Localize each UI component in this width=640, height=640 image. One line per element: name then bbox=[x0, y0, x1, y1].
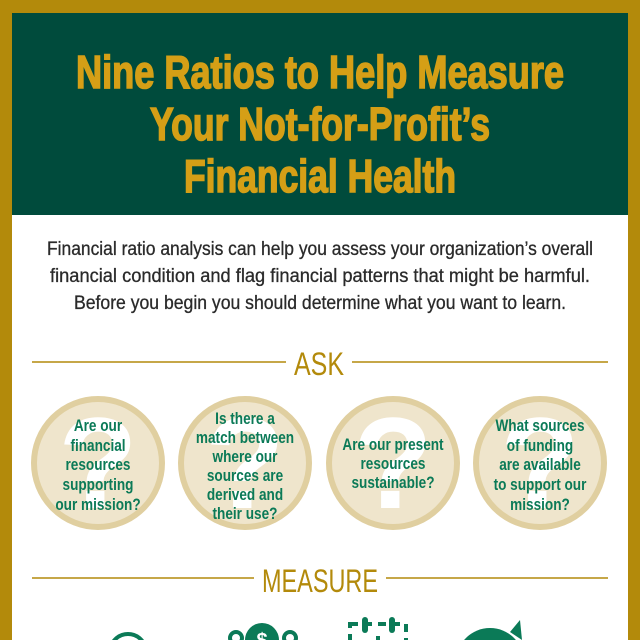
intro text: financial condition and flag financial patterns that might be harmful. bbox=[50, 266, 590, 287]
circle 4: ? bbox=[500, 390, 580, 536]
icon: target bbox=[110, 634, 146, 640]
circle 4 bbox=[476, 390, 604, 536]
circle 4: of funding bbox=[507, 437, 573, 455]
circle 4: to support our bbox=[494, 476, 586, 494]
circle 2: ? bbox=[205, 390, 285, 536]
circle 3: sustainable? bbox=[351, 474, 435, 492]
circle 3: ? bbox=[353, 390, 433, 536]
circle 2: match between bbox=[196, 429, 294, 447]
circle 2: where our bbox=[212, 448, 277, 466]
intro text: Financial ratio analysis can help you assess your organization’s overall bbox=[47, 239, 593, 260]
title: Financial Health bbox=[184, 150, 456, 202]
circle 2: sources are bbox=[207, 467, 284, 485]
circle 2: Is there a bbox=[215, 410, 275, 428]
circle 2: derived and bbox=[207, 486, 283, 504]
circle 1: supporting bbox=[63, 476, 133, 494]
title: Your Not-for-Profit’s bbox=[150, 98, 490, 150]
circle 1: ? bbox=[58, 390, 138, 536]
icon: refresh coin bbox=[456, 620, 524, 640]
title bbox=[76, 46, 564, 202]
circle 1: our mission? bbox=[55, 496, 141, 514]
circle 1 bbox=[34, 390, 162, 536]
circle 4: What sources bbox=[495, 417, 585, 435]
header panel bbox=[12, 13, 628, 215]
icon: calendar bbox=[350, 617, 406, 640]
circle 4: mission? bbox=[510, 496, 570, 514]
circle 3: resources bbox=[361, 455, 425, 473]
circle 2 bbox=[181, 390, 309, 536]
circle 3: Are our present bbox=[342, 436, 444, 454]
ask circles bbox=[34, 390, 604, 536]
intro text: Before you begin you should determine what you want to learn. bbox=[74, 293, 566, 314]
circle 3 bbox=[329, 390, 457, 536]
icon: people with dollar bbox=[230, 623, 296, 640]
circle 1: Are our bbox=[74, 417, 122, 435]
circle 1: financial bbox=[70, 437, 126, 455]
intro text bbox=[47, 239, 593, 314]
heading: ASK: ASK bbox=[294, 346, 344, 382]
circle 2: their use? bbox=[213, 505, 277, 523]
heading: MEASURE: MEASURE bbox=[262, 563, 378, 599]
circle 4: are available bbox=[499, 456, 581, 474]
circle 1: resources bbox=[66, 456, 130, 474]
